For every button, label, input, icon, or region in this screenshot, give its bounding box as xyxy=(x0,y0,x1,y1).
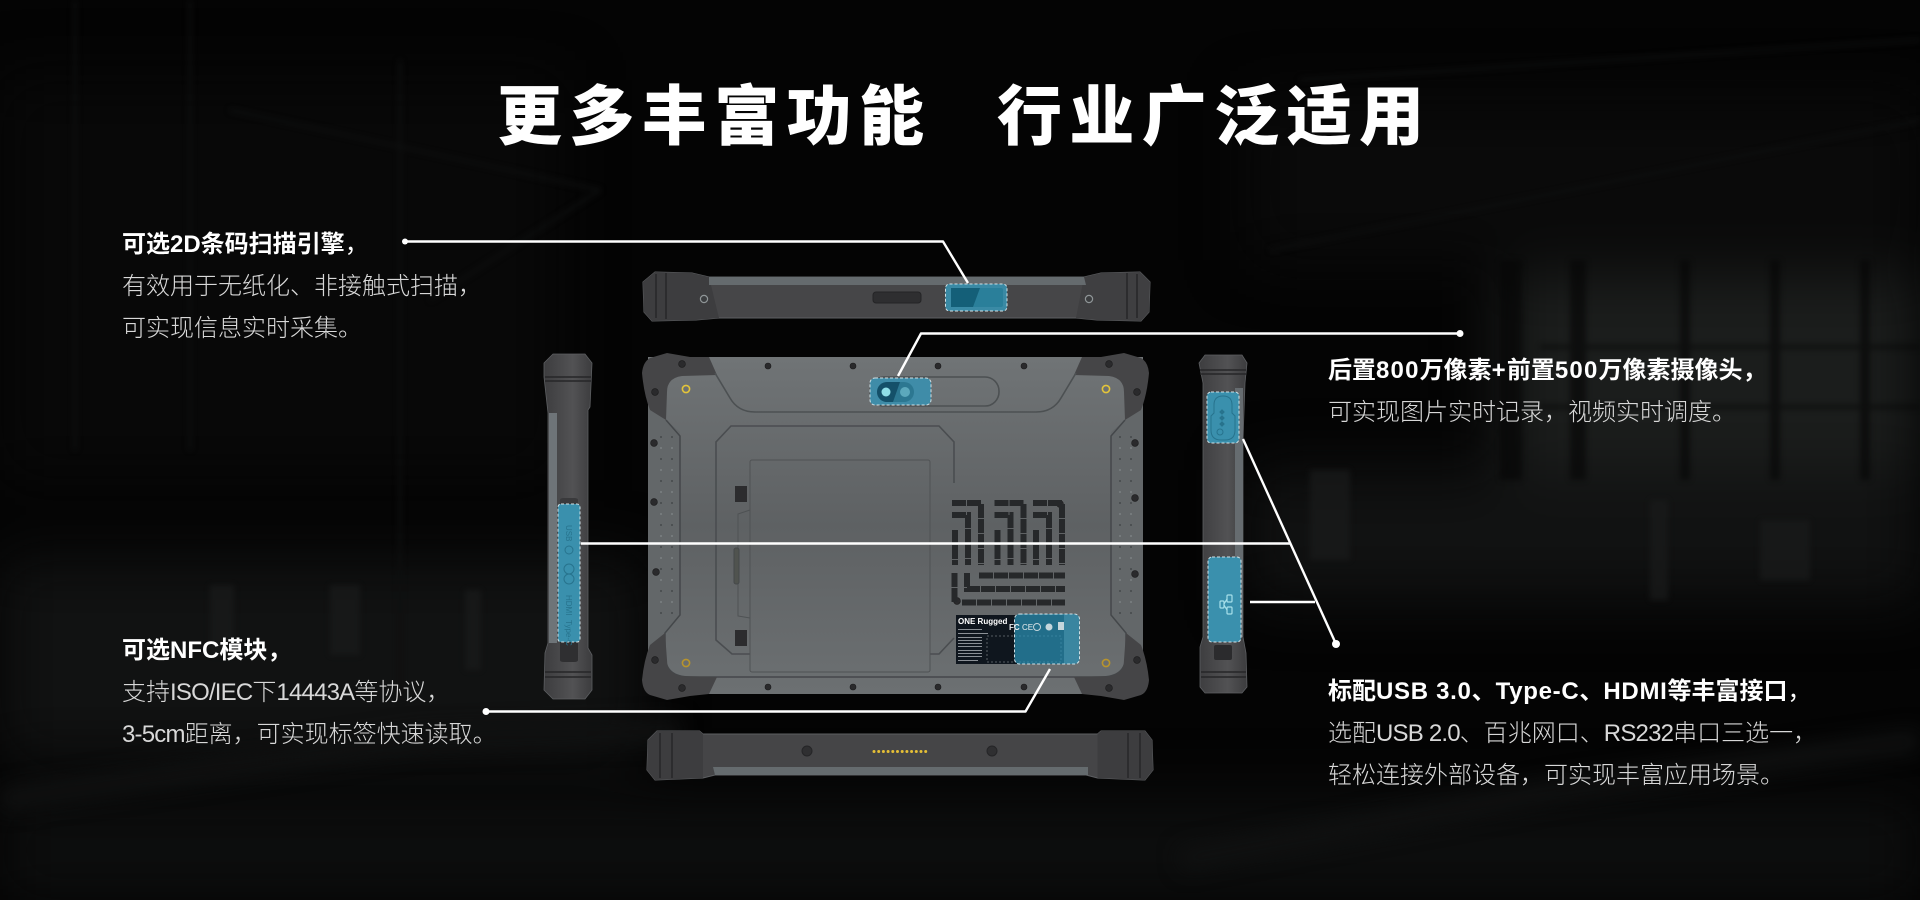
text block: interfaces: 标配USB 3.0、Type-C、HDMI等丰富接口， xyxy=(1328,678,1812,705)
title xyxy=(497,80,1431,153)
text block: interfaces: 选配USB 2.0、百兆网口、RS232串口三选一， xyxy=(1328,720,1817,747)
product label: ONE Rugged xyxy=(958,617,1007,626)
top recess line xyxy=(715,373,1076,412)
icon: side button highlight xyxy=(1207,392,1239,443)
icon: side port highlight: Type-C xyxy=(564,620,573,646)
icon: side port highlight xyxy=(558,504,580,646)
text block: cameras: 可实现图片实时记录，视频实时调度。 xyxy=(1328,399,1736,426)
latches xyxy=(735,486,747,502)
certification marks: CE xyxy=(1022,623,1033,632)
right edge view of tablet xyxy=(1199,355,1247,693)
text block: NFC module: 支持ISO/IEC下14443A等协议， xyxy=(122,679,450,706)
text block: interfaces: 轻松连接外部设备，可实现丰富应用场景。 xyxy=(1328,762,1784,789)
product label xyxy=(956,615,1064,664)
left edge view of tablet xyxy=(544,354,592,699)
icon: side port highlight: HDMI xyxy=(564,595,573,615)
certification marks: FC xyxy=(1009,623,1020,632)
text block: NFC module: 3-5cm距离，可实现标签快速读取。 xyxy=(122,721,497,748)
text block: cameras: 后置800万像素+前置500万像素摄像头， xyxy=(1328,357,1767,384)
text block: 2D barcode scanner: 有效用于无纸化、非接触式扫描， xyxy=(122,273,482,300)
icon: network port highlight xyxy=(1208,557,1241,642)
bottom edge view of tablet xyxy=(647,731,1153,780)
title: 更多丰富功能 xyxy=(497,80,931,153)
text block: 2D barcode scanner xyxy=(122,231,482,342)
icon: NFC area highlight xyxy=(1014,614,1080,664)
vent grille xyxy=(952,503,1065,603)
corner bumpers xyxy=(642,353,717,420)
text block: cameras xyxy=(1328,357,1767,426)
text block: 2D barcode scanner: 可选2D条码扫描引擎， xyxy=(122,231,369,258)
certification marks xyxy=(1009,622,1064,632)
icon: scanner window highlight xyxy=(946,284,1007,311)
callout line: NFC xyxy=(482,669,1050,715)
yellow rings xyxy=(682,385,1110,667)
text: 行业广泛适用 xyxy=(997,80,1431,153)
text block: 2D barcode scanner: 可实现信息实时采集。 xyxy=(122,315,362,342)
camera pill recess xyxy=(870,377,999,406)
back cover outline xyxy=(716,426,954,654)
screws xyxy=(651,361,1140,691)
callout line: camera xyxy=(898,330,1464,376)
callout line: barcode scanner xyxy=(402,238,968,283)
text block: NFC module xyxy=(122,637,497,748)
top edge view of tablet xyxy=(643,272,1150,321)
callout lines: interfaces xyxy=(581,439,1340,648)
icon: camera highlight xyxy=(870,378,931,405)
icon: side port highlight: USB xyxy=(564,525,573,541)
text block: NFC module: 可选NFC模块， xyxy=(122,637,291,664)
text block: interfaces xyxy=(1328,678,1817,789)
rear view of tablet xyxy=(642,353,1149,700)
side rubber strips xyxy=(648,400,680,660)
icon: pogo pin connector xyxy=(872,750,927,753)
